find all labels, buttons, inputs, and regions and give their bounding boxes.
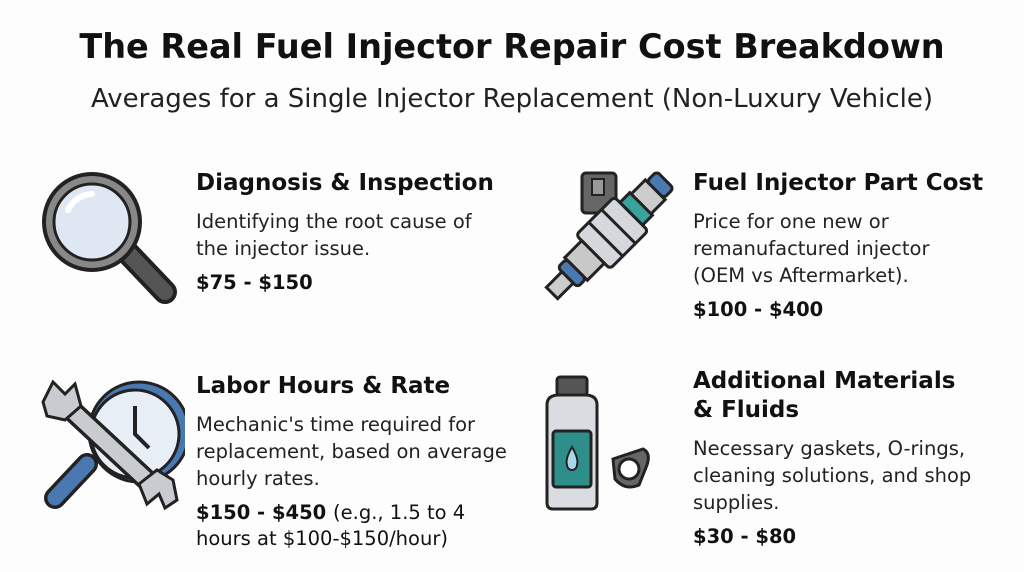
title: The Real Fuel Injector Repair Cost Breakdown — [79, 27, 945, 66]
price: labor: $150 - $450 (e.g., 1.5 to 4 hours at $100-$150/hour) — [196, 501, 465, 550]
icon: wrench and clock — [41, 380, 185, 510]
text: part cost description: Price for one new or remanufactured injector (OEM vs Aftermarket). — [693, 210, 929, 287]
heading: materials: & Fluids — [693, 397, 799, 423]
heading: part cost: Fuel Injector Part Cost — [693, 170, 983, 196]
panel: part cost — [693, 170, 983, 321]
text: materials description: Necessary gaskets, O-rings, cleaning solutions, and shop supplies. — [693, 437, 971, 514]
heading: materials — [693, 368, 955, 423]
icon: fuel injector — [544, 172, 674, 301]
heading: labor: Labor Hours & Rate — [196, 373, 450, 399]
price: materials: $30 - $80 — [693, 525, 796, 548]
text: diagnosis description: Identifying the root cause of the injector issue. — [196, 210, 472, 260]
text: labor description: Mechanic's time required for replacement, based on average hourly rates. — [196, 413, 507, 490]
panel: diagnosis — [196, 170, 494, 294]
price: diagnosis: $75 - $150 — [196, 271, 313, 294]
panel: materials — [693, 368, 971, 548]
price: part cost: $100 - $400 — [693, 298, 823, 321]
panel: labor — [196, 373, 507, 550]
subtitle: Averages for a Single Injector Replacement (Non-Luxury Vehicle) — [91, 84, 933, 114]
icon: fluid bottle and gasket — [546, 376, 650, 510]
heading: materials: Additional Materials — [693, 368, 955, 394]
heading: diagnosis: Diagnosis & Inspection — [196, 170, 494, 196]
icon: magnifying glass — [42, 172, 177, 304]
